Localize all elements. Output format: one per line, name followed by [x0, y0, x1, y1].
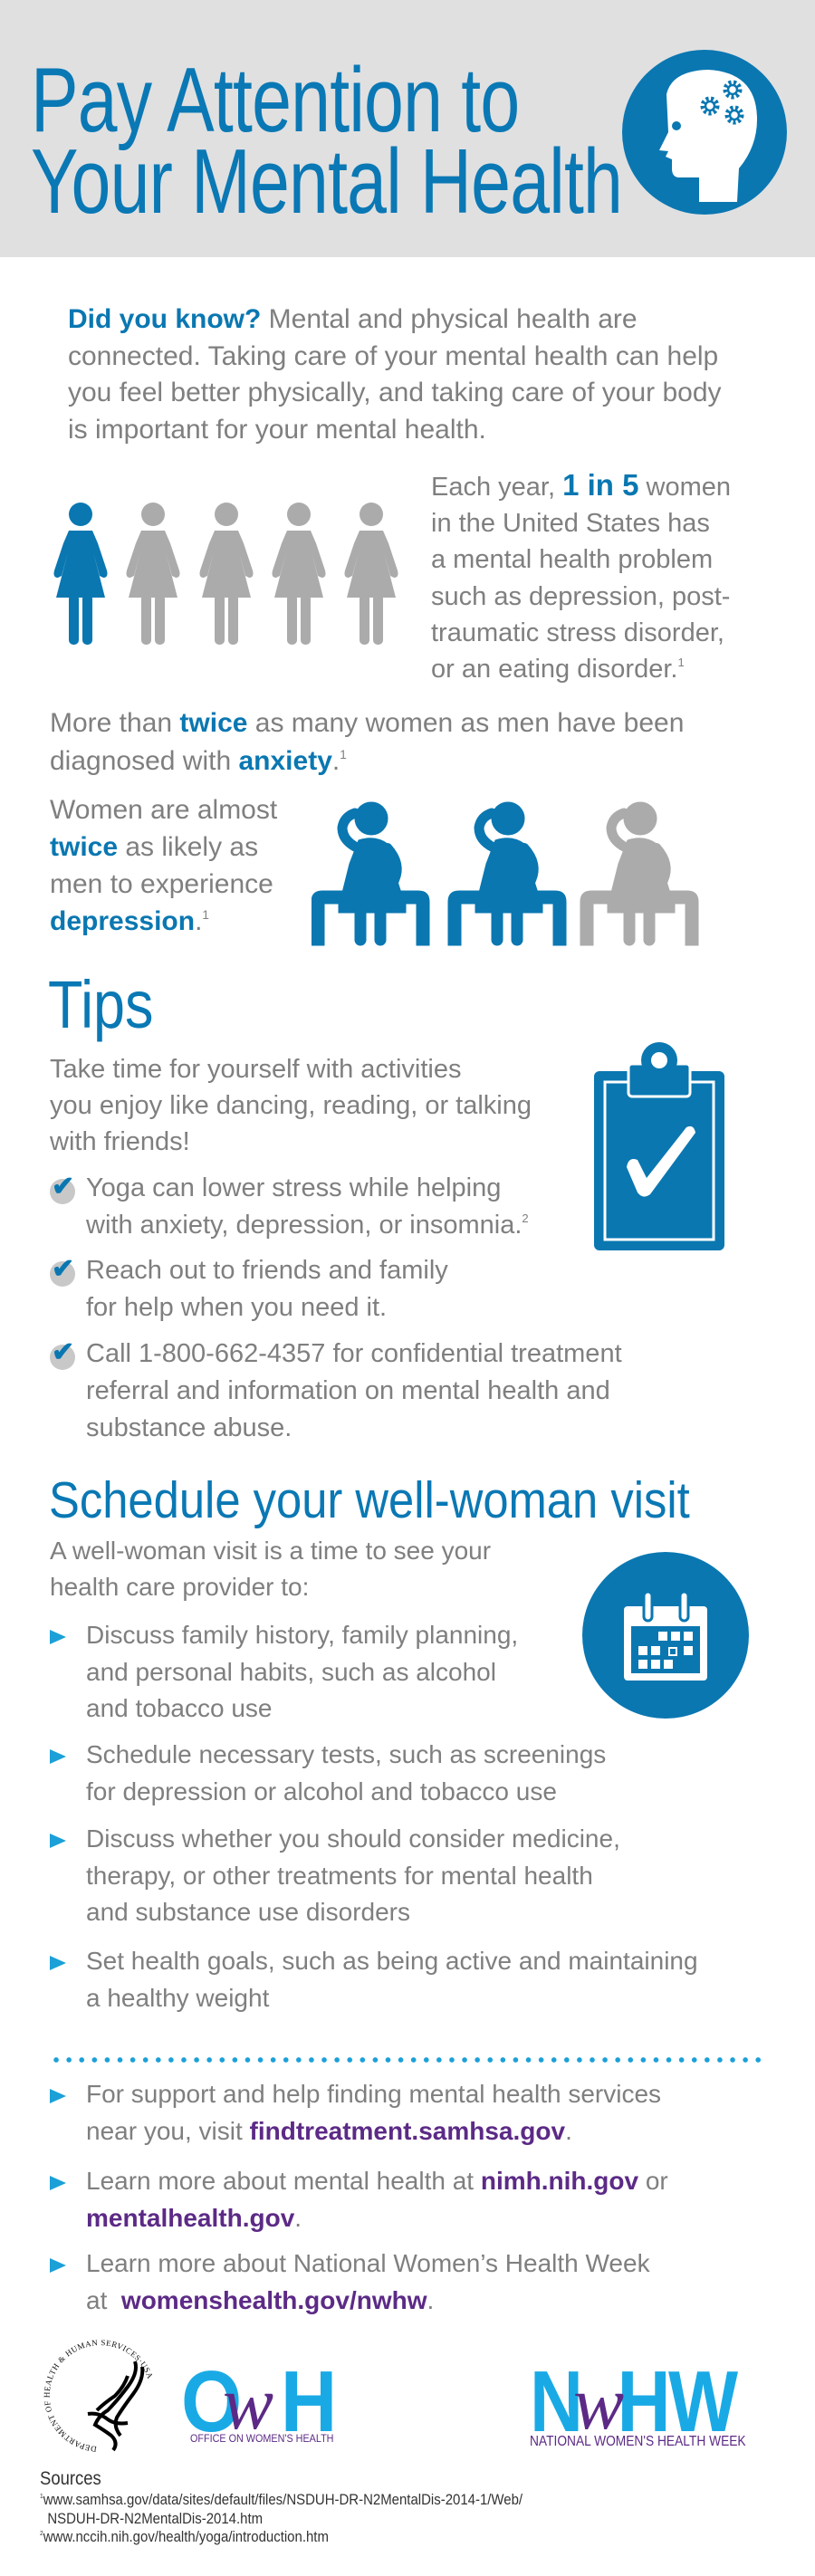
icon: five women, one highlighted [54, 503, 398, 645]
list: visit bullets: Schedule necessary tests, such as screenings [86, 1740, 606, 1768]
bullet: findtreatment [50, 2080, 661, 2145]
list: tips checks: referral and information on mental health and [86, 1376, 610, 1405]
text: 1 in 5 women: in the United States has [431, 509, 710, 538]
title: Your Mental Health [31, 131, 622, 233]
list: visit bullets: a healthy weight [86, 1983, 269, 2012]
title [31, 50, 622, 233]
logo: NWHW: N HW [530, 2353, 735, 2450]
list: visit bullets: for depression or alcohol and tobacco use [86, 1776, 557, 1805]
logo: NWHW: NATIONAL WOMEN'S HEALTH WEEK [530, 2434, 746, 2449]
list: resources: Learn more about National Women’s Health Week [86, 2249, 650, 2277]
text: 1 in 5 women [431, 468, 731, 684]
text: 1 in 5 women: a mental health problem [431, 545, 713, 574]
text: did you know: Did you know? Mental and physical health are [68, 304, 638, 334]
list: visit bullets: and personal habits, such as alcohol [86, 1657, 496, 1686]
sources: 2www.nccih.nih.gov/health/yoga/introduction.htm [40, 2528, 329, 2545]
sources [40, 2468, 523, 2545]
icon: clipboard [594, 1042, 724, 1250]
bullet: treatments [50, 1824, 620, 1926]
check item: call [50, 1337, 622, 1442]
text: did you know: is important for your mental health. [68, 415, 486, 444]
list: tips checks: with anxiety, depression, or insomnia.2 [86, 1211, 529, 1240]
logo: OWH: OFFICE ON WOMEN'S HEALTH [190, 2432, 333, 2445]
bullet: nimh [50, 2167, 668, 2232]
list: tips checks: Yoga can lower stress while helping [86, 1173, 501, 1202]
text: did you know: you feel better physically, and taking care of your body [68, 378, 722, 407]
text: depression [50, 795, 277, 936]
text: 1 in 5 women: or an eating disorder.1 [431, 655, 685, 684]
text: did you know: connected. Taking care of your mental health can help [68, 340, 718, 371]
heading: schedule visit: Schedule your well-woman visit [49, 1471, 690, 1529]
text: tips intro: you enjoy like dancing, reading, or talking [50, 1091, 532, 1120]
list: visit bullets: and tobacco use [86, 1694, 272, 1722]
text: tips intro [50, 1055, 532, 1156]
text: tips intro: Take time for yourself with activities [50, 1055, 461, 1084]
text: depression: Women are almost [50, 795, 277, 825]
header band [0, 0, 815, 257]
list: resources: mentalhealth.gov. [86, 2204, 302, 2231]
list: resources: at womenshealth.gov/nwhw. [86, 2285, 434, 2314]
text: depression: men to experience [50, 869, 273, 899]
list: visit bullets: therapy, or other treatments for mental health [86, 1862, 593, 1889]
list: tips checks: ✔ [52, 1172, 74, 1202]
icon: calendar [582, 1552, 749, 1719]
logo: HHS seal: DEPARTMENT OF HEALTH & HUMAN SERVICES·USA [43, 2340, 152, 2452]
list: tips checks: Reach out to friends and family [86, 1256, 448, 1285]
list: visit bullets: and substance use disorders [86, 1898, 410, 1926]
bullet: nwhw [50, 2249, 650, 2314]
list: tips checks: ✔ [52, 1254, 74, 1284]
bullet: tests [50, 1740, 606, 1805]
logo: OWH: w [223, 2361, 273, 2446]
check item: reach out [50, 1254, 448, 1322]
list: tips checks: for help when you need it. [86, 1293, 387, 1322]
title: Pay Attention to [31, 50, 519, 151]
text: visit intro: A well-woman visit is a time to see your [50, 1537, 491, 1565]
list: resources: near you, visit findtreatment.samhsa.gov. [86, 2117, 572, 2144]
text: 1 in 5 women: Each year, 1 in 5 women [431, 468, 731, 502]
sources: NSDUH-DR-N2MentalDis-2014.htm [47, 2510, 263, 2526]
heading: Tips: Tips [48, 967, 154, 1042]
text: did you know [68, 304, 722, 444]
sources: Sources [40, 2468, 101, 2489]
text: tips intro: with friends! [50, 1127, 190, 1156]
icon: head with gears [622, 50, 787, 215]
text: 1 in 5 women: traumatic stress disorder, [431, 618, 724, 647]
text: visit intro: health care provider to: [50, 1573, 309, 1601]
check item: yoga [50, 1172, 529, 1240]
list: tips checks: ✔ [52, 1337, 74, 1367]
list: visit bullets [50, 1621, 698, 2012]
text: 1 in 5 women: such as depression, post- [431, 582, 730, 611]
list: tips checks: Call 1-800-662-4357 for confidential treatment [86, 1339, 622, 1368]
list: resources: Learn more about mental health at nimh.nih.gov or [86, 2167, 668, 2195]
list: tips checks: substance abuse. [86, 1413, 292, 1442]
list: visit bullets: Discuss family history, family planning, [86, 1621, 518, 1649]
logo: NWHW: w [573, 2361, 624, 2446]
text: anxiety: More than twice as many women as men have been [50, 708, 684, 738]
list: visit bullets: Set health goals, such as being active and maintaining [86, 1947, 698, 1975]
list: resources [50, 2080, 668, 2314]
bullet: family history [50, 1621, 518, 1722]
list: resources: For support and help finding mental health services [86, 2080, 661, 2108]
text: anxiety: diagnosed with anxiety.1 [50, 746, 347, 776]
text: depression: twice as likely as [50, 832, 258, 862]
sources: 1www.samhsa.gov/data/sites/default/files/NSDUH-DR-N2MentalDis-2014-1/Web/ [40, 2491, 523, 2508]
text: visit intro [50, 1537, 491, 1601]
bullet: health goals [50, 1947, 698, 2012]
logo: OWH: O H [181, 2353, 335, 2450]
icon: seated depressed figures [312, 802, 699, 945]
text: anxiety [50, 708, 684, 776]
list: tips checks [50, 1172, 622, 1442]
list: visit bullets: Discuss whether you should consider medicine, [86, 1824, 620, 1853]
text: depression: depression.1 [50, 906, 209, 936]
